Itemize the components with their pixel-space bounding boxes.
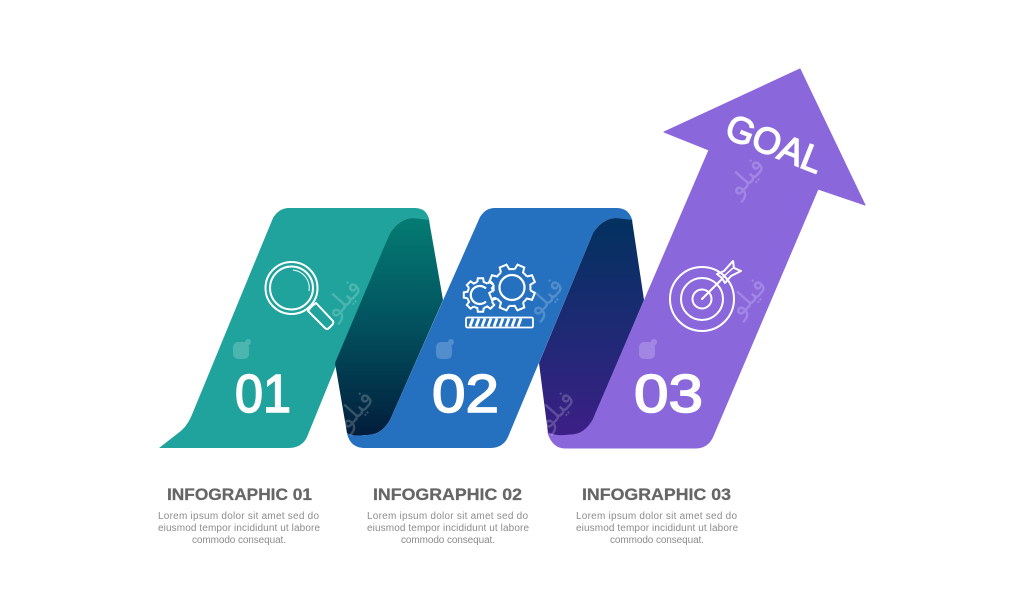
teal ribbon fold (335, 218, 443, 436)
text block: infographic 03 (576, 485, 738, 546)
watermark marks: فيلو (329, 384, 381, 437)
watermark marks: فيلو (720, 151, 772, 204)
body: infographic 03: commodo consequat. (610, 535, 704, 546)
icon: target with arrow (670, 261, 741, 331)
body: infographic 02: Lorem ipsum dolor sit amet sed do (367, 511, 528, 522)
icon: magnifying glass (266, 262, 333, 329)
text block: infographic 01 (158, 485, 320, 546)
blue ribbon fold (539, 218, 644, 436)
body: infographic 01: Lorem ipsum dolor sit amet sed do (158, 511, 319, 522)
body: infographic 01: commodo consequat. (192, 535, 286, 546)
panel: step 3 purple arrow (548, 69, 865, 448)
number 01: 01 (235, 364, 291, 424)
heading: infographic 02: INFOGRAPHIC 02 (373, 485, 522, 504)
body: infographic 02: commodo consequat. (401, 535, 495, 546)
panel: step 1 teal ribbon (159, 208, 443, 448)
panel: step 2 blue ribbon (347, 208, 644, 448)
text block: infographic 02 (367, 485, 529, 546)
body: infographic 01 (158, 511, 320, 546)
watermark marks: فيلو (722, 271, 774, 324)
heading: infographic 01: INFOGRAPHIC 01 (167, 485, 312, 504)
watermark marks: فيلو (519, 271, 571, 324)
icon: gears and progress bar (464, 257, 542, 328)
heading: infographic 03: INFOGRAPHIC 03 (582, 485, 731, 504)
heading: GOAL: GOAL (720, 106, 829, 181)
body: infographic 03 (576, 511, 738, 546)
number 02: 02 (432, 364, 499, 424)
watermark marks (233, 151, 774, 437)
number 03: 03 (634, 364, 703, 424)
body: infographic 02 (367, 511, 529, 546)
watermark marks: فيلو (317, 273, 369, 326)
body: infographic 03: eiusmod tempor incididunt ut labore (576, 523, 738, 534)
watermark marks: فيلو (530, 384, 582, 437)
body: infographic 01: eiusmod tempor incididunt ut labore (158, 523, 320, 534)
body: infographic 02: eiusmod tempor incididunt ut labore (367, 523, 529, 534)
body: infographic 03: Lorem ipsum dolor sit amet sed do (576, 511, 737, 522)
